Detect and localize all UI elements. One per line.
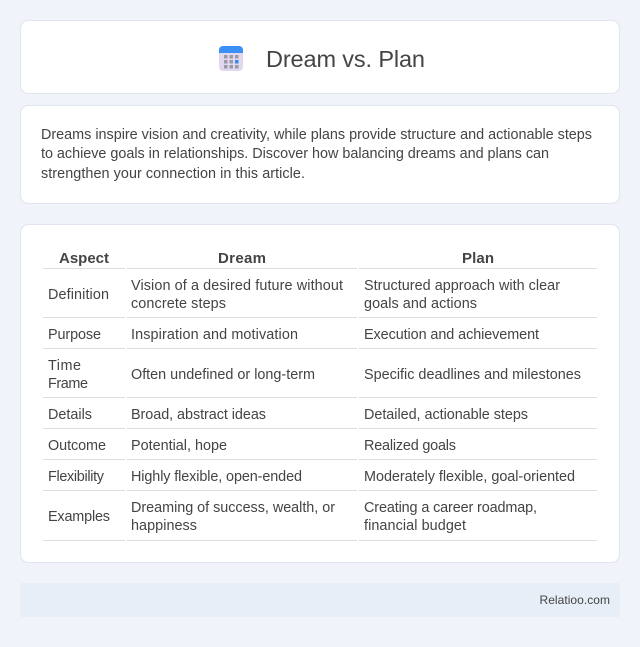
row: definition: concrete steps xyxy=(131,296,226,312)
row: examples: Examples xyxy=(48,509,110,525)
row: examples: happiness xyxy=(131,518,197,534)
row: flexibility xyxy=(48,469,575,485)
row: purpose: Inspiration and motivation xyxy=(131,327,298,343)
row: flexibility: Flexibility xyxy=(48,469,105,485)
row: definition: Definition xyxy=(48,287,109,303)
row: definition: goals and actions xyxy=(364,296,477,312)
table header xyxy=(59,250,494,267)
row: details: Broad, abstract ideas xyxy=(131,407,266,423)
icon: calendar xyxy=(219,46,243,71)
row: outcome: Realized goals xyxy=(364,438,456,454)
row: examples: financial budget xyxy=(364,518,466,534)
row: definition: Vision of a desired future without xyxy=(131,278,343,294)
intro text: strengthen your connection in this article. xyxy=(41,166,305,182)
intro text: to achieve goals in relationships. Discover how balancing dreams and plans can xyxy=(41,146,549,162)
table header: Aspect xyxy=(59,250,109,267)
row: definition xyxy=(48,278,560,312)
row: outcome: Potential, hope xyxy=(131,438,227,454)
row: details xyxy=(48,407,528,423)
row: time frame: Time xyxy=(48,358,81,374)
row: flexibility: Highly flexible, open-ended xyxy=(131,469,302,485)
title: Dream vs. Plan xyxy=(266,46,425,72)
row: details: Details xyxy=(48,407,92,423)
footer: Relatioo.com xyxy=(540,593,610,607)
row: time frame: Frame xyxy=(48,376,88,392)
table header: Plan xyxy=(462,250,494,267)
row: outcome xyxy=(48,438,456,454)
row: purpose: Purpose xyxy=(48,327,101,343)
row: definition: Structured approach with clear xyxy=(364,278,560,294)
panel: introduction xyxy=(20,106,620,204)
row: time frame: Often undefined or long-term xyxy=(131,367,315,383)
table header: Dream xyxy=(218,250,266,267)
panel: comparison table xyxy=(20,224,620,562)
row: time frame: Specific deadlines and milestones xyxy=(364,367,581,383)
panel: title card xyxy=(20,20,620,94)
footer xyxy=(20,583,620,617)
row: examples: Creating a career roadmap, xyxy=(364,500,537,516)
row: outcome: Outcome xyxy=(48,438,106,454)
row: flexibility: Moderately flexible, goal-oriented xyxy=(364,469,575,485)
intro text: Dreams inspire vision and creativity, while plans provide structure and actionable steps xyxy=(41,127,592,143)
row: details: Detailed, actionable steps xyxy=(364,407,528,423)
row: purpose: Execution and achievement xyxy=(364,327,539,343)
row: examples xyxy=(48,500,537,534)
row: purpose xyxy=(48,327,539,343)
row: time frame xyxy=(48,358,581,392)
row: examples: Dreaming of success, wealth, or xyxy=(131,500,335,516)
intro text xyxy=(41,127,592,182)
